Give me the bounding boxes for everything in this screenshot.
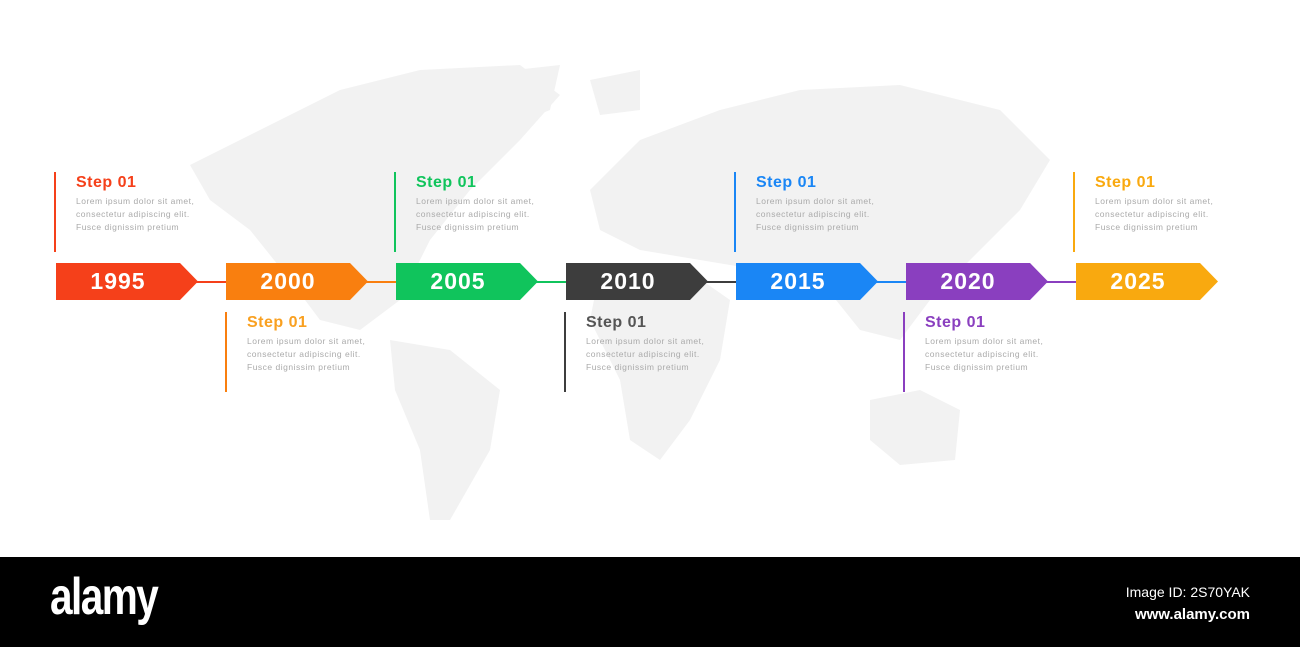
callout 2025: consectetur adipiscing elit.	[1095, 209, 1209, 219]
connector line	[190, 281, 1090, 283]
callout 1995: Step 01	[76, 174, 136, 191]
year box 2015	[736, 263, 878, 300]
footer bar	[0, 557, 1300, 647]
callout 2020: Step 01	[925, 314, 985, 331]
year box 1995: 1995	[90, 268, 146, 294]
callout 2000: Fusce dignissim pretium	[247, 362, 350, 372]
callout 2015: Lorem ipsum dolor sit amet,	[756, 196, 874, 206]
year box 2005: 2005	[430, 268, 486, 294]
callout 2020: consectetur adipiscing elit.	[925, 349, 1039, 359]
callout 2025: Fusce dignissim pretium	[1095, 222, 1198, 232]
image id	[1126, 584, 1250, 623]
year box 2010	[566, 263, 708, 300]
callout 2020	[903, 312, 1043, 392]
callout 1995	[54, 172, 194, 252]
callout 2005	[394, 172, 534, 252]
callout 2005: Fusce dignissim pretium	[416, 222, 519, 232]
callout 1995: Fusce dignissim pretium	[76, 222, 179, 232]
callout 2020: Fusce dignissim pretium	[925, 362, 1028, 372]
year box 2005	[396, 263, 538, 300]
image id: www.alamy.com	[1135, 606, 1250, 623]
callout 2010: Step 01	[586, 314, 646, 331]
year box 2020: 2020	[940, 268, 996, 294]
callout 2025	[1073, 172, 1213, 252]
year box 1995	[56, 263, 198, 300]
callout 2000: Step 01	[247, 314, 307, 331]
year box 2000	[226, 263, 368, 300]
year box 2020	[906, 263, 1048, 300]
year box 2010: 2010	[600, 268, 656, 294]
callout 2000: Lorem ipsum dolor sit amet,	[247, 336, 365, 346]
callout 2025: Step 01	[1095, 174, 1155, 191]
callout 2010: consectetur adipiscing elit.	[586, 349, 700, 359]
year box 2000: 2000	[260, 268, 316, 294]
callout 2010: Lorem ipsum dolor sit amet,	[586, 336, 704, 346]
callout 2005: Lorem ipsum dolor sit amet,	[416, 196, 534, 206]
callout 2015: Fusce dignissim pretium	[756, 222, 859, 232]
callout 2000: consectetur adipiscing elit.	[247, 349, 361, 359]
callout 1995: consectetur adipiscing elit.	[76, 209, 190, 219]
year box 2025	[1076, 263, 1218, 300]
image id: Image ID: 2S70YAK	[1126, 584, 1250, 600]
callout 2010	[564, 312, 704, 392]
callout 2015	[734, 172, 874, 252]
callout 2025: Lorem ipsum dolor sit amet,	[1095, 196, 1213, 206]
callout 2005: Step 01	[416, 174, 476, 191]
year box 2025: 2025	[1110, 268, 1166, 294]
year box 2015: 2015	[770, 268, 826, 294]
logo: alamy	[50, 568, 157, 626]
callout 2015: Step 01	[756, 174, 816, 191]
callout 1995: Lorem ipsum dolor sit amet,	[76, 196, 194, 206]
callout 2000	[225, 312, 365, 392]
callout 2020: Lorem ipsum dolor sit amet,	[925, 336, 1043, 346]
callout 2015: consectetur adipiscing elit.	[756, 209, 870, 219]
callout 2005: consectetur adipiscing elit.	[416, 209, 530, 219]
callout 2010: Fusce dignissim pretium	[586, 362, 689, 372]
